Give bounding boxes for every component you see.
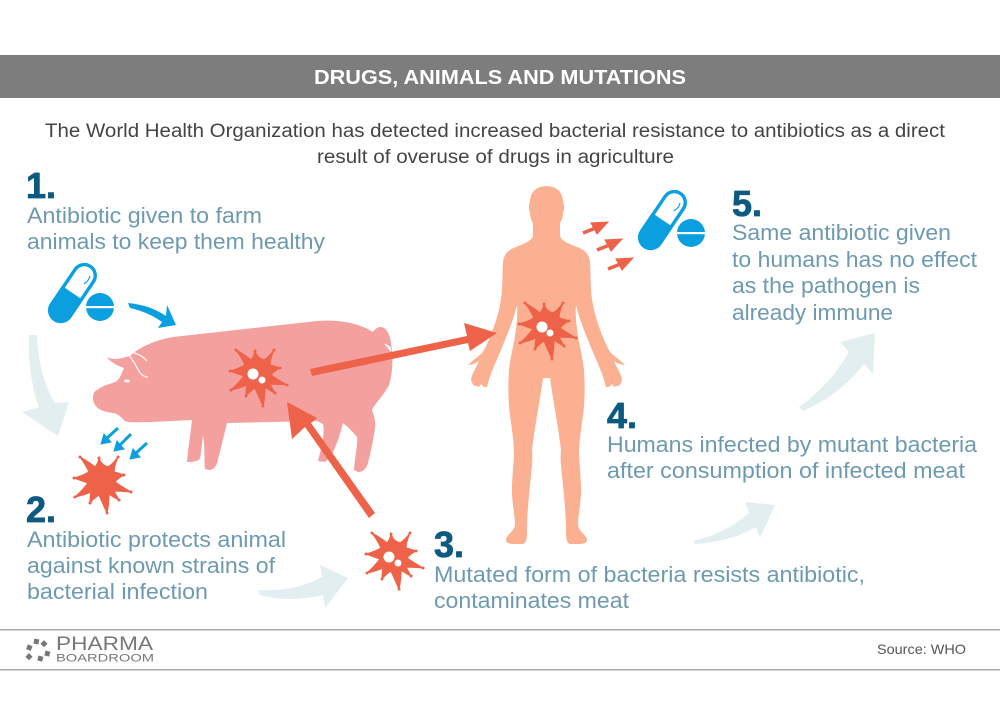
step 5 text: 5. (732, 183, 762, 224)
source: Source: WHO (877, 641, 966, 657)
logo: PHARMA (56, 634, 153, 655)
arrows: red human to pill (583, 222, 633, 270)
step 4 text (607, 395, 977, 483)
step 2 text: 2. (26, 489, 56, 530)
step 4 text: 4. (607, 395, 637, 436)
icon: pill right (633, 186, 705, 255)
title banner: DRUGS, ANIMALS AND MUTATIONS (314, 66, 686, 89)
logo: BOARDROOM (56, 652, 154, 664)
arrow: pale step 2 to 3 (258, 565, 348, 608)
arrows: blue antibiotic to bacterium (101, 428, 147, 459)
icon: pig (93, 321, 392, 472)
step 5 text: as the pathogen is (732, 273, 920, 298)
step 5 text: to humans has no effect (732, 247, 978, 272)
logo (25, 634, 154, 664)
subtitle (45, 121, 946, 168)
icon: bacterium blocked (72, 456, 132, 514)
step 2 text (26, 489, 286, 604)
step 1 text: 1. (26, 165, 56, 206)
arrow: pale step 4 to 5 (799, 333, 875, 411)
icon: bacterium in human (518, 302, 578, 360)
step 1 text (26, 165, 326, 254)
step 3 text (434, 524, 865, 613)
arrow: blue pill to pig (128, 303, 176, 328)
arrow: pale step 3 to 4 (693, 502, 775, 544)
step 4 text: after consumption of infected meat (607, 458, 966, 483)
step 3 text: contaminates meat (434, 588, 630, 613)
arrow: pig to human (310, 323, 497, 376)
step 2 text: bacterial infection (27, 579, 208, 604)
step 2 text: against known strains of (27, 553, 276, 578)
icon: bacterium in pig (228, 348, 288, 408)
step 1 text: animals to keep them healthy (27, 229, 326, 254)
icon: human figure (468, 186, 625, 544)
step 1 text: Antibiotic given to farm (27, 203, 262, 228)
step 3 text: 3. (434, 524, 464, 565)
step 5 text (732, 183, 978, 325)
arrow: pale step 1 to 2 (22, 335, 69, 436)
subtitle: The World Health Organization has detected increased bacterial resistance to antibiotics as a direct (45, 121, 946, 142)
step 2 text: Antibiotic protects animal (27, 527, 286, 552)
step 4 text: Humans infected by mutant bacteria (607, 432, 977, 457)
arrow: mutated bacteria to pig (287, 402, 375, 518)
subtitle: result of overuse of drugs in agriculture (317, 147, 674, 168)
step 5 text: Same antibiotic given (732, 220, 951, 245)
icon: bacterium mutated (364, 532, 424, 590)
icon: pill left (43, 259, 114, 328)
title banner (0, 55, 1000, 98)
step 3 text: Mutated form of bacteria resists antibiotic, (434, 562, 865, 587)
step 5 text: already immune (732, 300, 893, 325)
